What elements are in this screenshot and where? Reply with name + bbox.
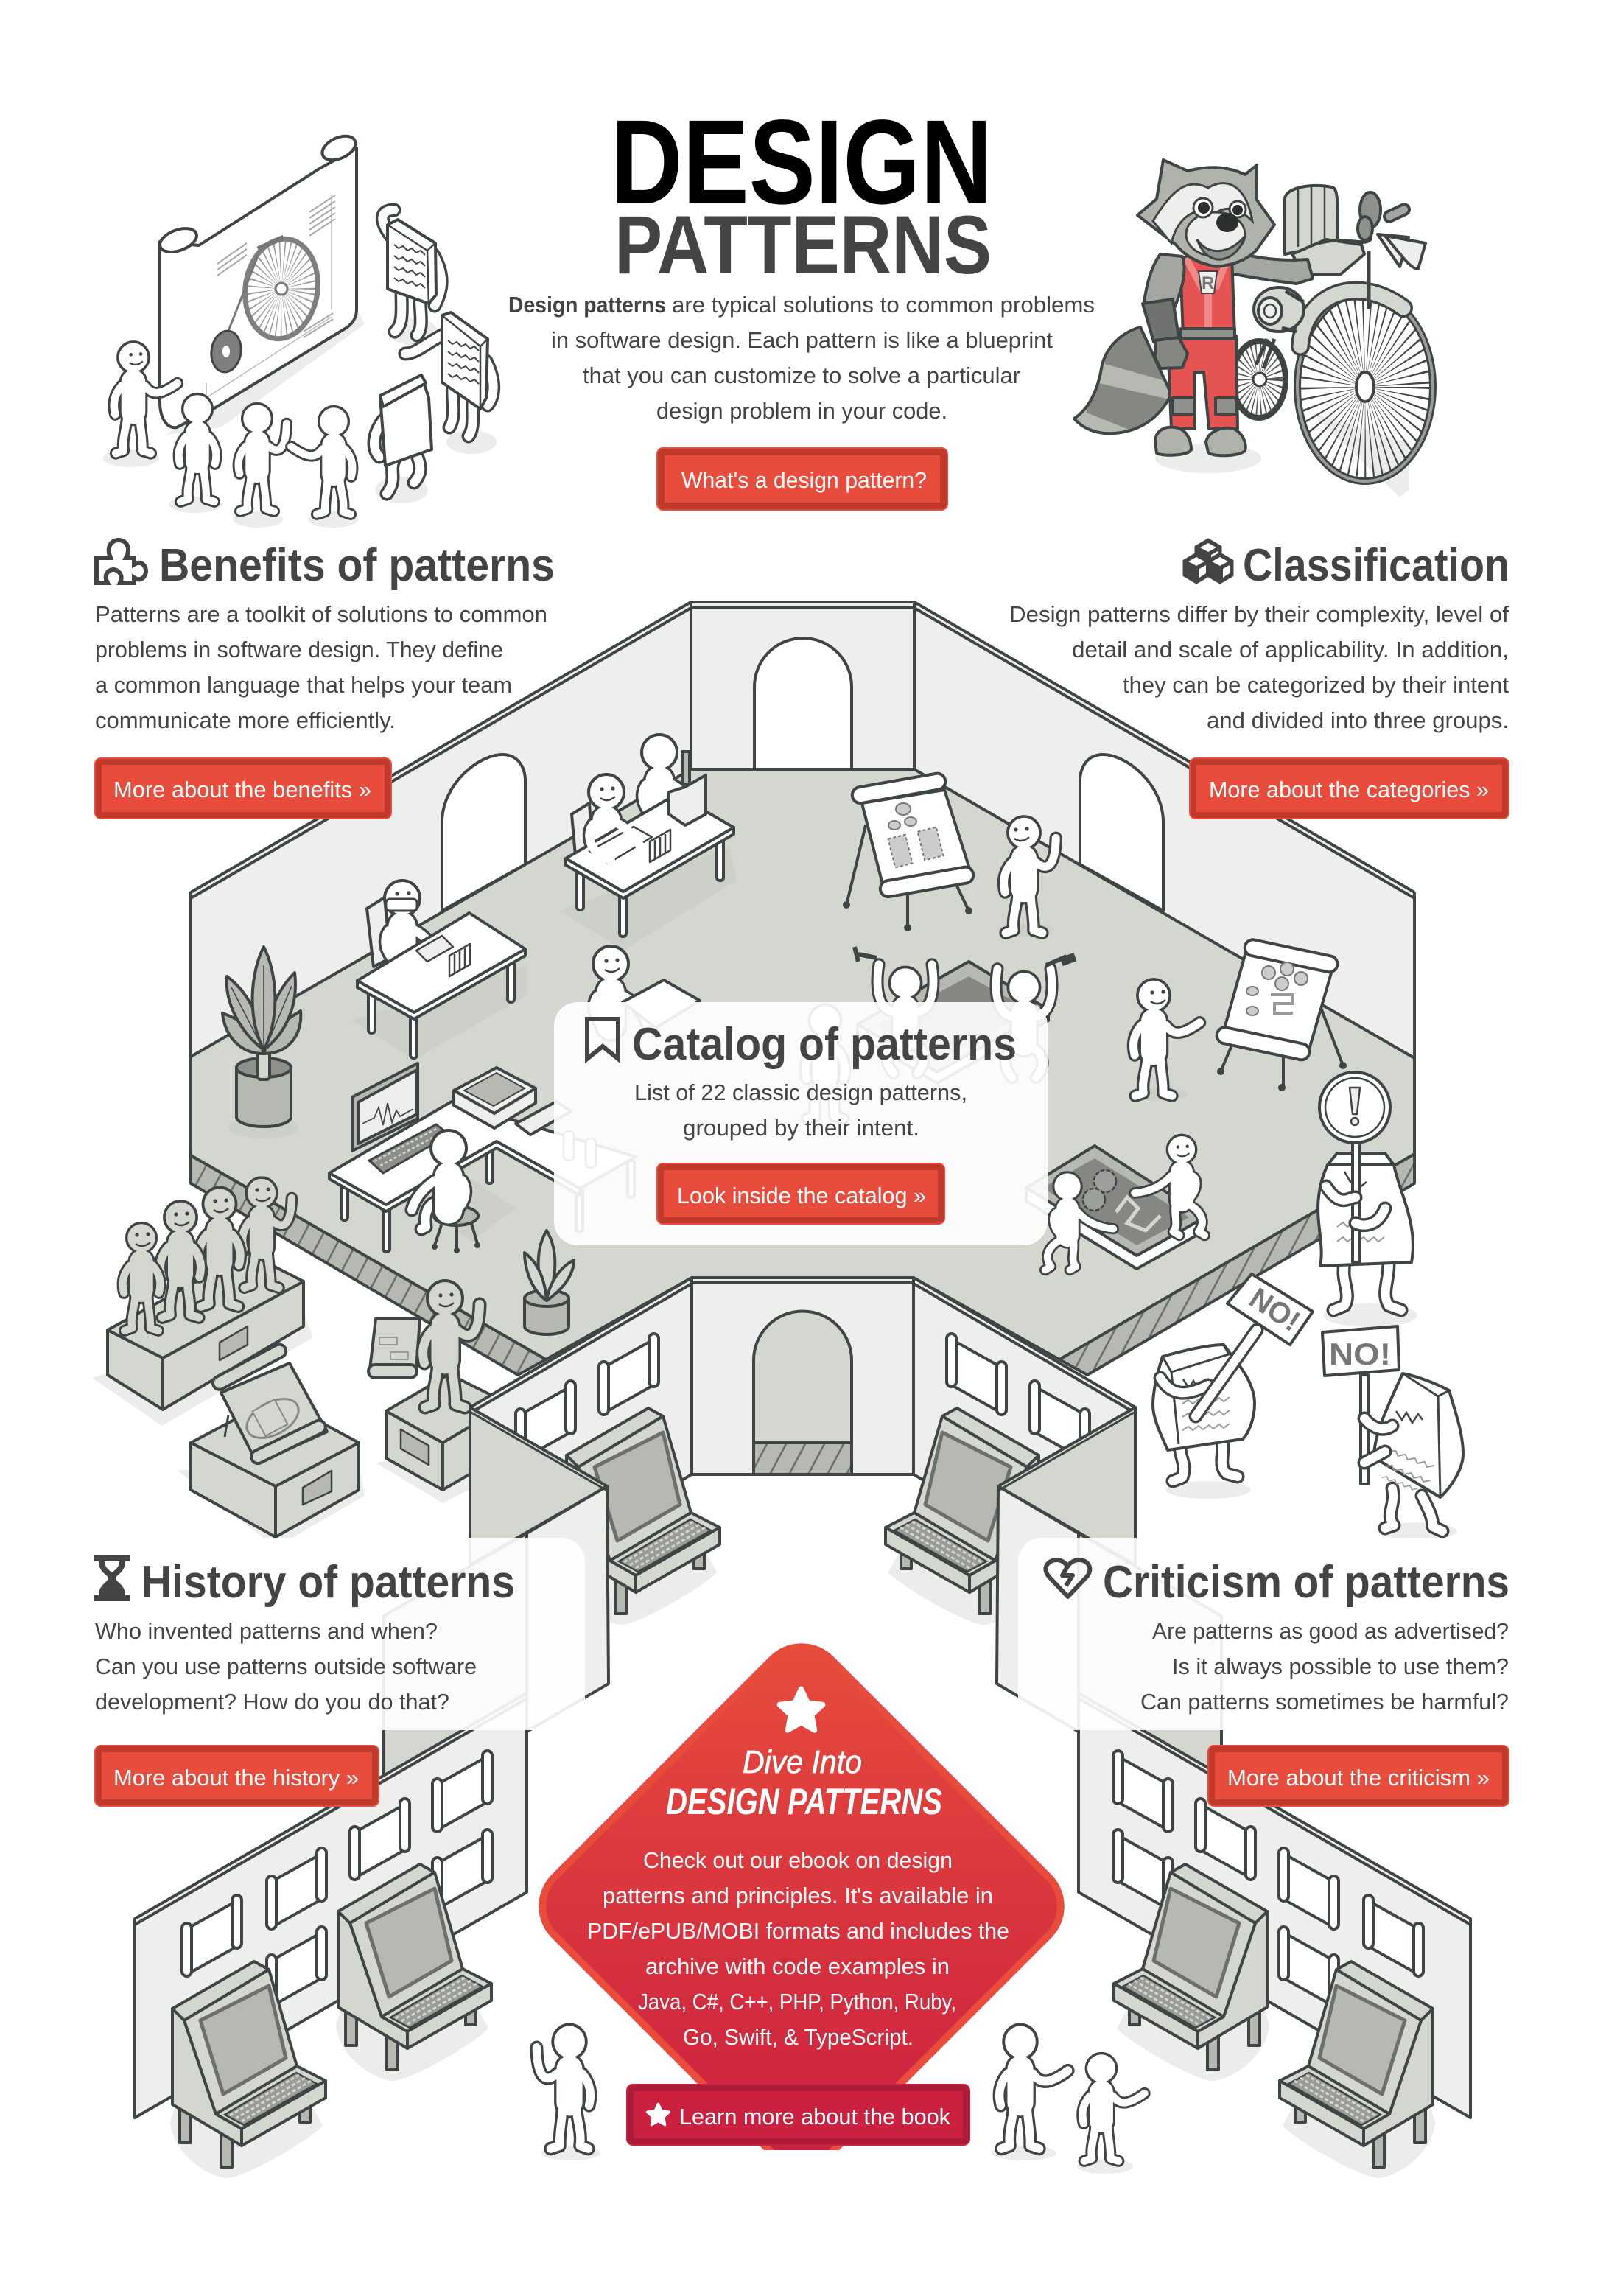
icon: hourglass <box>94 1555 130 1601</box>
diamond badge <box>542 1647 1061 2166</box>
left front wings <box>135 1278 720 2178</box>
title <box>611 94 992 291</box>
button <box>1208 1746 1509 1806</box>
intro text: are typical solutions to common problems <box>672 292 1095 318</box>
L-shaped computer desk <box>329 1063 636 1252</box>
raccoon mascot with bicycle: R <box>1202 273 1214 293</box>
body text: Patterns are a toolkit of solutions to common <box>95 601 547 627</box>
book description: patterns and principles. It's available in <box>603 1883 993 1908</box>
icon: bookmark <box>587 1019 618 1059</box>
book title <box>666 1744 942 1822</box>
section: catalog <box>587 1019 1017 1224</box>
body text: Is it always possible to use them? <box>1172 1653 1509 1679</box>
center front wall with arch <box>692 1278 914 1474</box>
button: learn more <box>627 2085 969 2145</box>
protester with diagonal NO sign: NO! <box>1244 1282 1305 1338</box>
body text <box>95 1618 477 1715</box>
heading: Classification <box>1243 540 1509 591</box>
book title: Dive Into <box>743 1744 862 1780</box>
person standing behind panel <box>805 1004 845 1119</box>
first pedestal shadow and body <box>92 1253 313 1426</box>
raccoon mascot with bicycle <box>1074 160 1433 497</box>
heading: History of patterns <box>141 1557 515 1608</box>
back walls of the isometric hall <box>191 602 1414 1183</box>
button: More about the benefits » <box>113 777 371 802</box>
icon: broken heart <box>1045 1560 1090 1597</box>
panel: criticism backdrop <box>1018 1538 1529 1730</box>
section: classification <box>1009 539 1509 819</box>
protester with diagonal NO sign <box>1153 1274 1313 1499</box>
body text: List of 22 classic design patterns, <box>634 1079 967 1105</box>
heading: Benefits of patterns <box>159 540 555 591</box>
intro text: in software design. Each pattern is like a blueprint <box>551 327 1053 353</box>
button <box>657 1163 944 1224</box>
section: criticism <box>1045 1557 1509 1806</box>
walking documents around the blueprint <box>374 210 497 503</box>
body text <box>1009 601 1509 733</box>
protester with upright NO sign <box>1322 1326 1463 1540</box>
floor of the hall <box>191 769 1414 1375</box>
body text: Design patterns differ by their complexity, level of <box>1009 601 1509 627</box>
body text: communicate more efficiently. <box>95 707 396 733</box>
intro text: Design patterns <box>508 292 666 318</box>
button: learn more: Learn more about the book <box>679 2104 950 2129</box>
body text: Who invented patterns and when? <box>95 1618 438 1644</box>
button: More about the criticism » <box>1227 1765 1490 1791</box>
book description: PDF/ePUB/MOBI formats and includes the <box>587 1918 1009 1944</box>
button: More about the categories » <box>1209 777 1489 802</box>
heading: Criticism of patterns <box>1103 1557 1509 1608</box>
book description: Java, C#, C++, PHP, Python, Ruby, <box>638 1989 956 2015</box>
body text <box>1140 1618 1509 1715</box>
button <box>95 758 391 819</box>
white person working at the box <box>1045 1172 1113 1270</box>
intro text <box>508 292 1095 424</box>
person standing at the drafting desk <box>593 946 700 1032</box>
button: More about the history » <box>113 1765 359 1791</box>
large potted plant <box>222 947 301 1138</box>
four statues on the pedestal <box>123 1177 292 1331</box>
intro text: design problem in your code. <box>656 398 947 424</box>
book promo diamond <box>542 1647 1061 2166</box>
book description <box>587 1847 1009 2050</box>
seated person at the computer with stool <box>412 1130 480 1253</box>
person scratching head <box>997 816 1056 937</box>
body text: they can be categorized by their intent <box>1123 672 1509 698</box>
easel with blueprint left <box>843 772 975 931</box>
right front wings mirrored <box>886 1278 1470 2178</box>
intro text: that you can customize to solve a particular <box>583 363 1020 388</box>
easel with blueprint right <box>1216 938 1347 1091</box>
lower right component box with gears <box>1026 1146 1205 1269</box>
book description: Check out our ebook on design <box>643 1847 953 1873</box>
bottom people near the book badge <box>536 2024 1144 2174</box>
body text: detail and scale of applicability. In addition, <box>1072 637 1509 662</box>
top-left blueprint <box>157 131 365 435</box>
section: history <box>94 1555 515 1806</box>
second pedestal with blueprint <box>177 1342 365 1547</box>
desk with masked scientist <box>352 881 527 1060</box>
body text <box>634 1079 967 1141</box>
book description: Go, Swift, & TypeScript. <box>683 2024 914 2050</box>
panel: catalog backdrop <box>554 1002 1048 1245</box>
button: what's a design pattern: What's a design pattern? <box>681 467 927 493</box>
button <box>95 1746 379 1806</box>
protester with upright NO sign: NO! <box>1329 1337 1391 1371</box>
desk with two scientists and microscope <box>560 735 737 951</box>
body text: Can patterns sometimes be harmful? <box>1140 1689 1509 1715</box>
third pedestal with statue holding a scroll <box>368 1281 508 1503</box>
person pointing at second easel <box>1129 979 1200 1101</box>
panel: history backdrop <box>74 1538 585 1730</box>
button <box>1190 758 1509 819</box>
heading: Catalog of patterns <box>632 1019 1017 1070</box>
body text: a common language that helps your team <box>95 672 512 698</box>
protester with warning sign <box>1318 1072 1417 1327</box>
body text: problems in software design. They define <box>95 637 503 662</box>
body text: Are patterns as good as advertised? <box>1152 1618 1509 1644</box>
button: what's a design pattern <box>657 448 947 510</box>
icon: puzzle piece <box>97 540 146 583</box>
icon: cubes <box>1184 539 1232 583</box>
body text: development? How do you do that? <box>95 1689 449 1715</box>
icon: star <box>779 1689 823 1730</box>
body text: Can you use patterns outside software <box>95 1653 477 1679</box>
body text: and divided into three groups. <box>1207 707 1509 733</box>
body text <box>95 601 547 733</box>
book description: archive with code examples in <box>645 1953 950 1979</box>
button: Look inside the catalog » <box>677 1183 926 1208</box>
people around the blueprint <box>103 342 358 528</box>
section: benefits <box>95 540 555 819</box>
body text: grouped by their intent. <box>683 1115 919 1141</box>
title: PATTERNS <box>614 199 992 291</box>
box being assembled by workers <box>855 947 1076 1083</box>
small potted plant <box>525 1231 574 1334</box>
book title: DESIGN PATTERNS <box>666 1781 942 1822</box>
title: DESIGN <box>611 94 992 229</box>
person leaning over the box <box>1135 1135 1204 1235</box>
